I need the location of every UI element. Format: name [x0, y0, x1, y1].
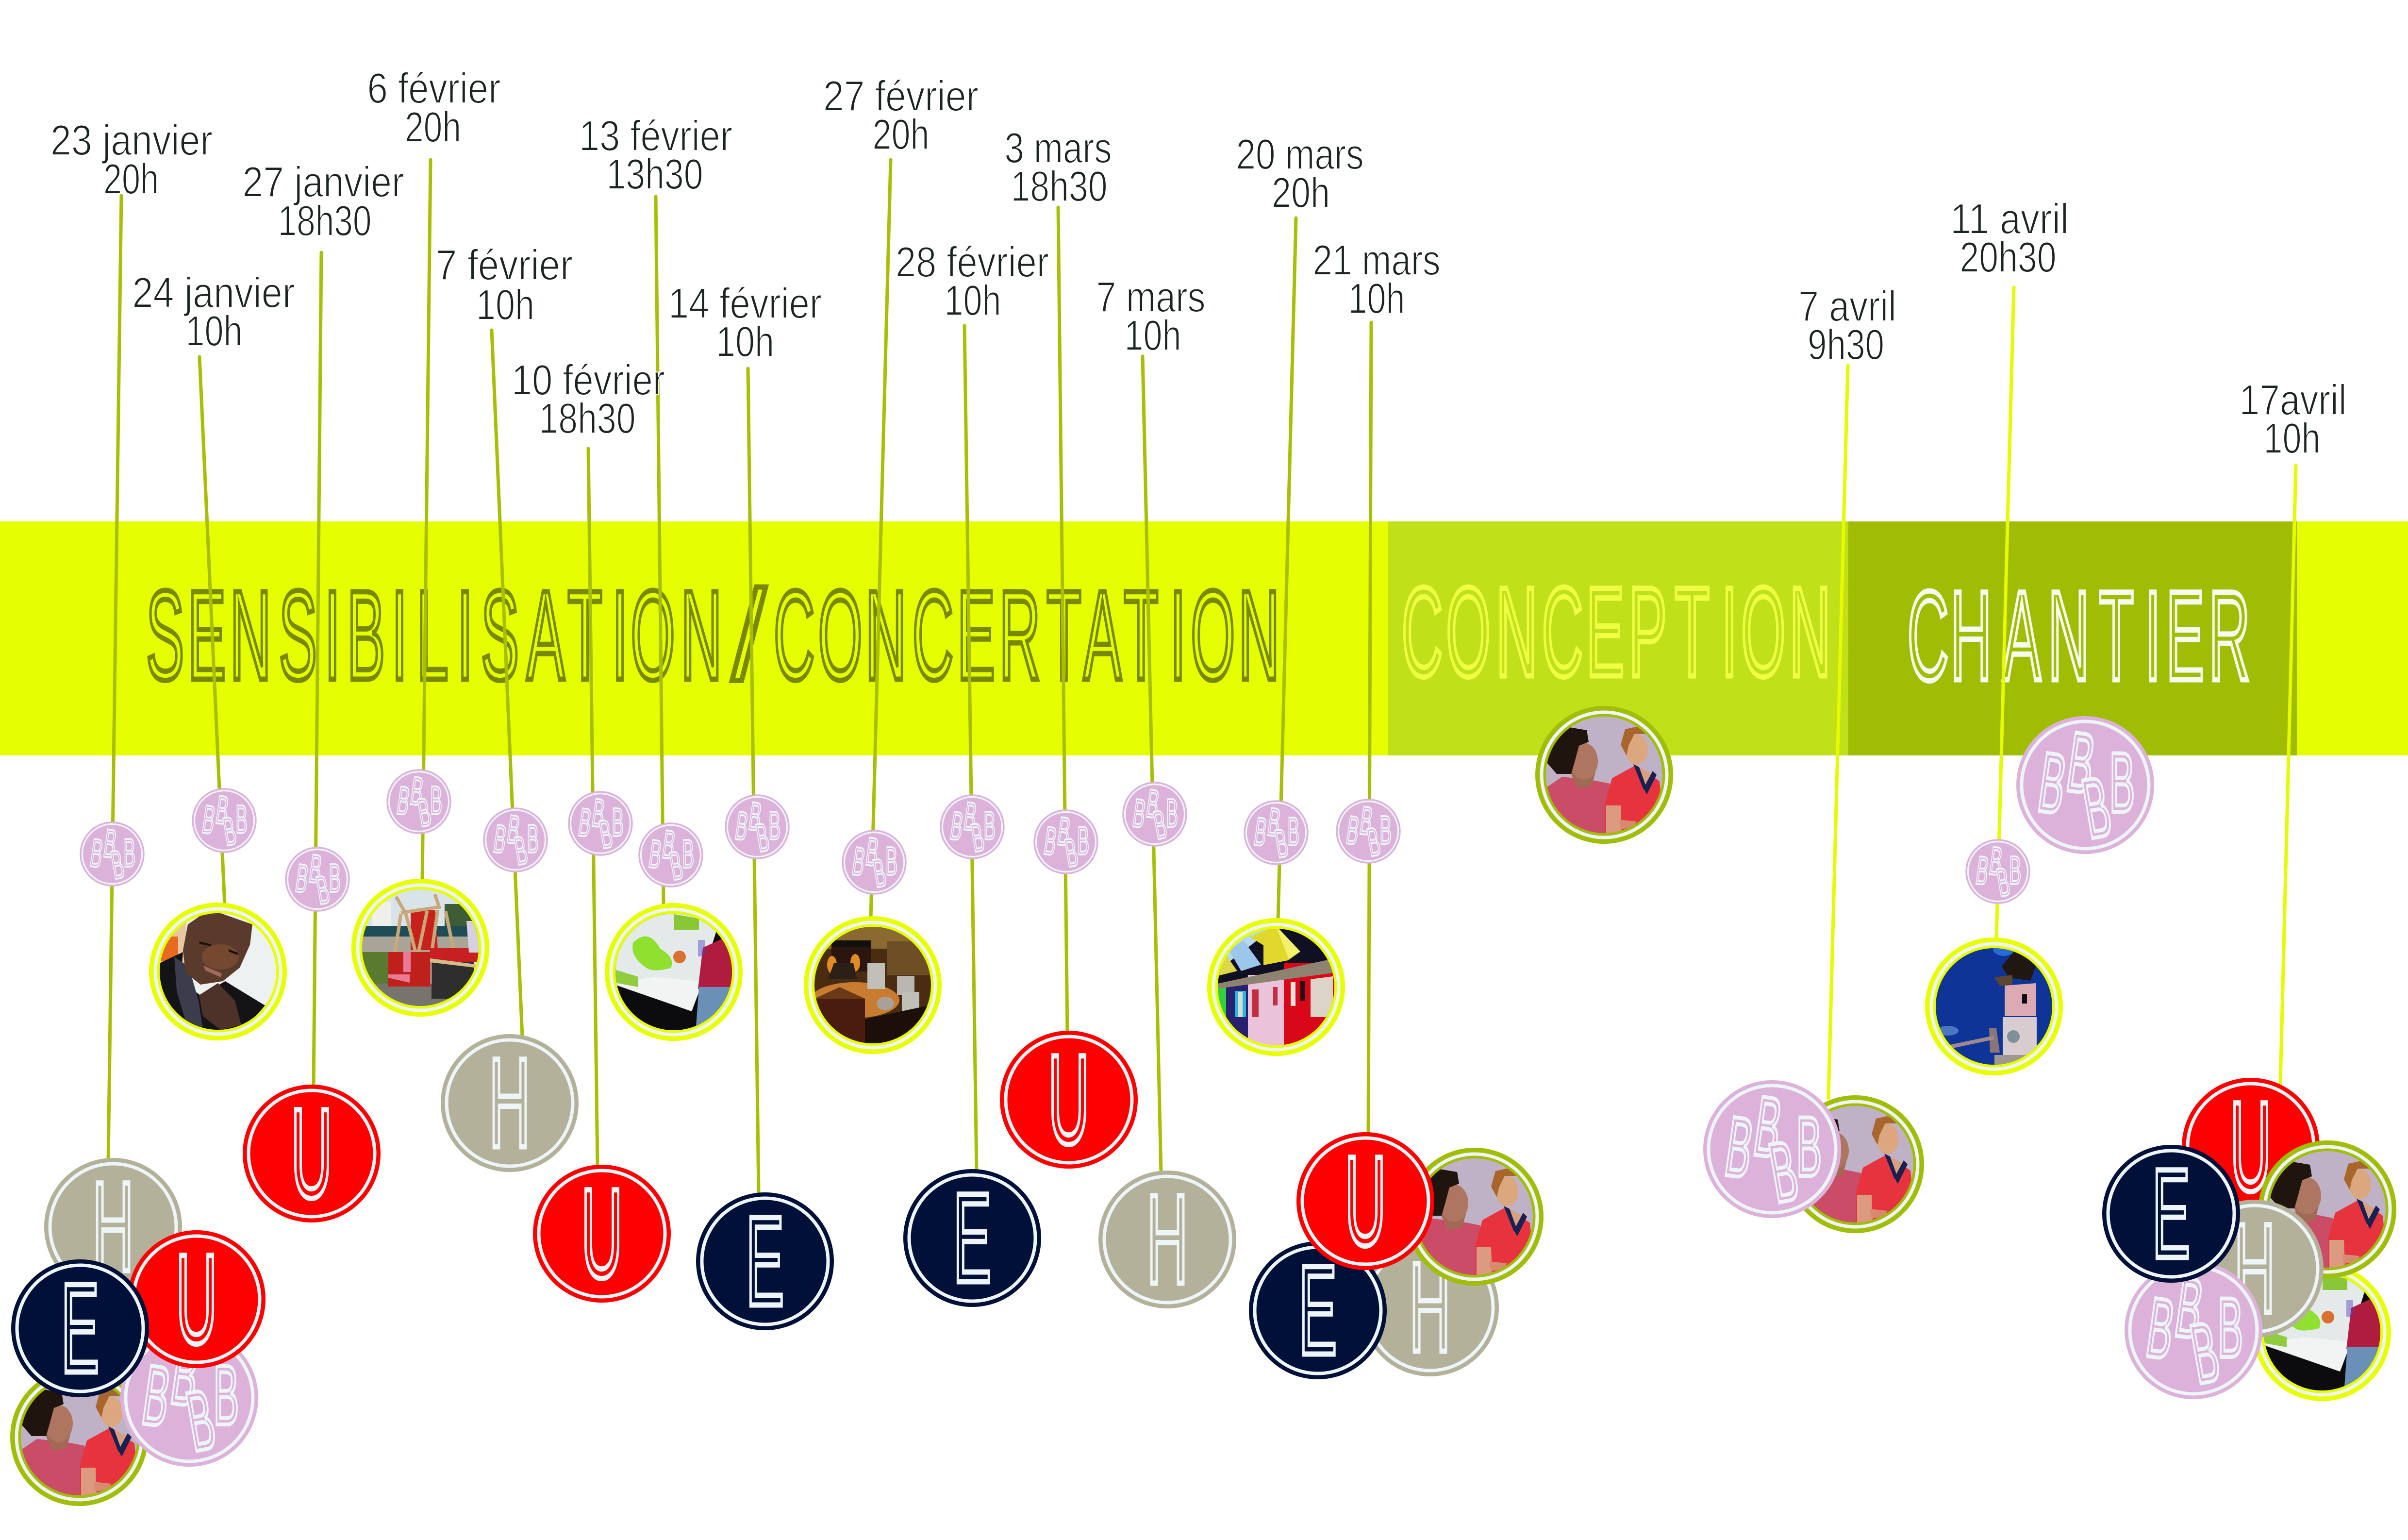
badges: single U, H and E events: H — [1146, 1169, 1188, 1311]
photo badge: knights at round table — [804, 916, 942, 1054]
date labels: 9h30 — [1808, 320, 1884, 368]
photo badge: coloured houses — [1207, 918, 1345, 1056]
small badges: BBBB events: B — [408, 768, 426, 814]
small badges: BBBB events: B — [983, 803, 996, 848]
connector lines — [108, 160, 2296, 1194]
date labels: 7 avril — [1798, 282, 1896, 330]
date labels: 23 janvier — [50, 116, 213, 164]
badges: single U, H and E events: U — [291, 1083, 332, 1225]
date labels: 27 janvier — [243, 158, 404, 206]
date labels: 10h — [476, 281, 534, 329]
heading: chantier: CHANTIER — [1908, 565, 2250, 707]
badge: BBBB large over chantier band — [2016, 714, 2154, 856]
date labels: 14 février — [668, 279, 822, 327]
small badges: BBBB events: B — [1252, 809, 1270, 855]
cluster: 17 avril: B — [2142, 1279, 2180, 1377]
small badges: BBBB events: B — [1077, 818, 1089, 863]
small badges: BBBB events: B — [1272, 820, 1291, 867]
small badges: BBBB events: B — [1379, 807, 1392, 853]
cluster: 23 janvier: E — [61, 1257, 99, 1400]
badge: BBBB large over chantier band: B — [2033, 734, 2072, 832]
badges: single U, H and E events: U — [581, 1163, 623, 1305]
small badges: BBBB events: B — [870, 850, 889, 896]
date labels: 20 mars — [1236, 130, 1364, 178]
small badges: BBBB events: B — [235, 797, 248, 842]
date labels: 17avril — [2240, 376, 2346, 424]
cluster: 17 avril: H — [2234, 1198, 2275, 1340]
badges: single U, H and E events: H — [489, 1032, 531, 1174]
small badges: BBBB events: B — [596, 811, 615, 857]
small badges: BBBB events: B — [527, 816, 539, 861]
small badges: BBBB events: B — [1062, 829, 1081, 876]
cluster: 17 avril — [2102, 1076, 2396, 1402]
cluster: 17 avril: U — [2230, 1076, 2272, 1218]
date labels: 20h30 — [1960, 233, 2056, 281]
small badges: BBBB events: B — [395, 778, 413, 824]
small badges: BBBB events: B — [576, 800, 594, 846]
small badges: BBBB events: B — [1987, 838, 2005, 884]
small badges: BBBB events: B — [329, 855, 341, 901]
small badges: BBBB events: B — [948, 803, 966, 849]
date labels: 18h30 — [1011, 162, 1108, 210]
small badges: BBBB events: B — [306, 846, 325, 892]
small badges: BBBB events: B — [1055, 808, 1073, 854]
date labels: 20h — [873, 110, 929, 158]
cluster: 23 janvier: H — [92, 1156, 134, 1298]
date labels: 13h30 — [607, 150, 703, 198]
small badges: BBBB events: B — [589, 790, 608, 836]
cluster: 17 avril: B — [2218, 1280, 2243, 1375]
small badges: BBBB events: B — [220, 808, 239, 854]
small badges: BBBB events: B — [200, 797, 218, 843]
small badges: BBBB events: B — [1150, 802, 1170, 848]
small badges: BBBB events: B — [733, 803, 751, 849]
date labels: 13 février — [579, 112, 732, 160]
small badges: BBBB events: B — [430, 778, 442, 823]
small badges: BBBB events: B — [2009, 848, 2021, 893]
cluster: 23 janvier: B — [137, 1347, 176, 1445]
small badges: BBBB events: B — [88, 830, 106, 876]
small badges: BBBB events: B — [753, 814, 772, 861]
heading: sensibilisation / concertation — [146, 565, 1279, 707]
small badges: BBBB events: B — [647, 831, 664, 877]
date labels: 18h30 — [278, 197, 372, 245]
badge: BBBB large over chantier band: B — [2062, 714, 2100, 812]
date labels: 7 février — [436, 241, 573, 289]
cluster: 23 janvier: B — [180, 1371, 221, 1469]
small badges: BBBB events: B — [101, 820, 119, 867]
date labels: 10h — [716, 318, 774, 366]
small badges: BBBB events: B — [1166, 790, 1178, 836]
badge: BBBB large over chantier band: B — [2076, 758, 2117, 856]
cluster: 23 janvier: B — [166, 1326, 204, 1424]
date labels: 28 février — [896, 238, 1049, 286]
small badges: BBBB events: B — [768, 803, 781, 848]
badges: single U, H and E events — [243, 1029, 1236, 1333]
small badges: BBBB events: B — [1364, 819, 1383, 865]
small badges: BBBB events: B — [1144, 781, 1162, 827]
small badges: BBBB events: B — [1042, 818, 1060, 864]
heading: conception: CONCEPTION — [1401, 561, 1831, 703]
small badges: BBBB events: B — [660, 821, 678, 868]
small badges: BBBB events: B — [1344, 807, 1362, 854]
small badges: BBBB events: B — [213, 787, 232, 833]
date labels: 18h30 — [539, 394, 636, 442]
photo badge: project duo over conception band — [1535, 706, 1673, 844]
small badges: BBBB events: B — [108, 841, 127, 888]
small badges: BBBB events: B — [504, 806, 523, 853]
cluster: 21 mars: H — [1409, 1237, 1451, 1379]
small badges: BBBB events: B — [1974, 848, 1992, 894]
date labels: 3 mars — [1005, 124, 1112, 172]
photo badge: man portrait — [149, 903, 287, 1040]
cluster: 7 avril: B — [1796, 1099, 1822, 1194]
cluster: 23 janvier — [10, 1156, 266, 1506]
date labels: 11 avril — [1950, 195, 2069, 243]
badges: single U, H and E events: E — [746, 1190, 784, 1333]
small badges: BBBB events: B — [1287, 809, 1299, 854]
cluster: 21 mars: U — [1345, 1130, 1386, 1272]
small badges: BBBB events: B — [123, 830, 135, 875]
date labels: 10h — [945, 276, 1001, 324]
band: yellow timeline background — [0, 521, 2408, 755]
cluster: 17 avril: E — [2152, 1143, 2190, 1285]
heading: sensibilisation / concertation: CONCERTATION — [774, 565, 1279, 707]
date labels: 10h — [1348, 274, 1405, 322]
badges: single U, H and E events: E — [953, 1167, 991, 1309]
small badges: BBBB events: B — [1265, 799, 1283, 845]
date labels — [50, 64, 2346, 462]
small badges: BBBB events: B — [293, 855, 311, 902]
small badges: BBBB events: B — [850, 838, 868, 885]
small badges: BBBB events: B — [1357, 798, 1376, 844]
date labels: 21 mars — [1312, 236, 1441, 284]
cluster: 7 avril: B — [1763, 1122, 1804, 1221]
cluster: 17 avril: B — [2184, 1304, 2225, 1402]
date labels: 10h — [185, 307, 243, 355]
date labels: 27 février — [823, 72, 979, 120]
cluster: 7 avril: B — [1720, 1098, 1759, 1196]
cluster: 23 janvier: U — [176, 1228, 217, 1371]
date labels: 20h — [405, 103, 461, 151]
small badges: BBBB events: B — [1993, 859, 2013, 905]
panel: conception phase — [1388, 521, 1848, 755]
small badges: BBBB events: B — [313, 867, 332, 913]
photo badge: wooden chalet — [351, 879, 489, 1017]
date labels: 20h — [1272, 168, 1330, 217]
small badges: BBBB events: B — [863, 829, 881, 875]
panel: chantier phase — [1848, 521, 2297, 755]
small badges: BBBB events: B — [746, 793, 764, 839]
cluster: 21 mars: E — [1299, 1239, 1337, 1382]
date labels: 24 janvier — [132, 268, 295, 317]
small badges: BBBB events: B — [511, 827, 531, 874]
cluster: 7 avril: B — [1749, 1078, 1787, 1176]
date labels: 10 février — [512, 356, 665, 404]
small badges: BBBB events: B — [968, 814, 987, 861]
photo badge: tower at night — [1925, 937, 2063, 1075]
heading: sensibilisation / concertation: / — [732, 565, 765, 706]
date labels: 10h — [1124, 311, 1181, 359]
small badges: BBBB events: B — [491, 816, 509, 862]
date labels: 10h — [2264, 414, 2320, 462]
small badges: BBBB events: B — [612, 800, 624, 845]
date labels: 7 mars — [1096, 273, 1206, 321]
cluster: 17 avril: B — [2170, 1259, 2209, 1357]
cluster: 21 mars — [1249, 1130, 1544, 1382]
date labels: 6 février — [367, 64, 501, 112]
small badges: BBBB events: B — [682, 831, 694, 876]
small badges: BBBB events: B — [961, 793, 980, 839]
heading: sensibilisation / concertation: SENSIBILISATION — [146, 565, 722, 707]
small badges: BBBB events: B — [415, 789, 434, 836]
photo badge: map held up — [605, 903, 743, 1041]
cluster: 23 janvier: B — [214, 1347, 239, 1442]
small badges: BBBB events: B — [1130, 790, 1148, 837]
small badges: BBBB events: B — [885, 838, 897, 884]
small badges: BBBB events — [80, 768, 2030, 913]
date labels: 20h — [103, 155, 159, 203]
badge: BBBB large over chantier band: B — [2109, 735, 2135, 830]
badges: single U, H and E events: U — [1048, 1029, 1090, 1171]
small badges: BBBB events: B — [666, 842, 686, 889]
cluster: 7 avril — [1703, 1078, 1924, 1233]
